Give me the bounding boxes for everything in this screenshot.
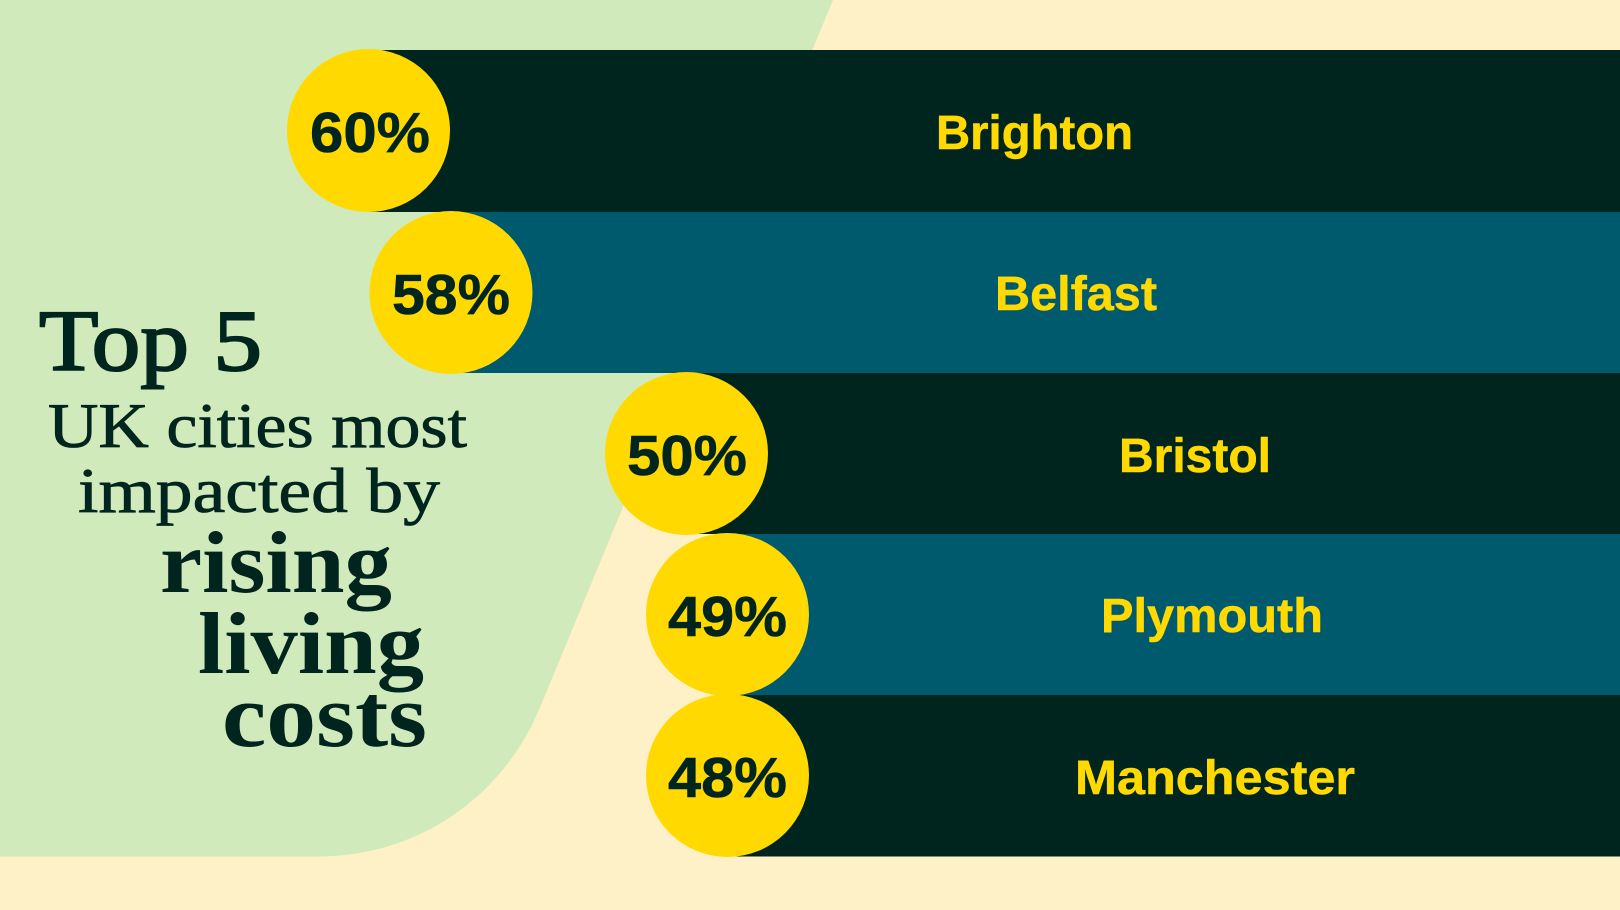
label: Manchester: Manchester [1075,752,1355,805]
row: Brighton 60% [287,49,1620,212]
heading: Top 5: Top 5 [39,292,262,389]
row: Belfast 58% [370,211,1620,374]
value: 50%: 50% [627,424,747,488]
panel: green title shape [0,0,833,856]
emphasis line: costs: costs [222,667,427,766]
title block [39,292,467,766]
circle: 60% [287,49,450,212]
bar: Belfast [451,212,1620,373]
row: Plymouth 49% [646,533,1620,696]
subheading line: UK cities most: UK cities most [48,390,467,461]
bar: Manchester [727,695,1620,856]
circle: 48% [646,694,809,857]
subheading line: impacted by: impacted by [78,455,440,526]
value: 60%: 60% [310,101,430,165]
bar: Bristol [686,373,1620,534]
label: Bristol: Bristol [1119,430,1271,483]
bar: Brighton [368,50,1620,212]
value: 58%: 58% [392,263,510,327]
value: 48%: 48% [668,746,787,810]
value: 49%: 49% [668,585,787,649]
emphasis line: rising: rising [160,515,392,612]
emphasis line: living: living [198,596,424,693]
circle: 50% [605,372,768,535]
row: Manchester 48% [646,694,1620,857]
bar: Plymouth [727,534,1620,695]
label: Belfast: Belfast [995,268,1157,321]
circle: 58% [370,211,532,374]
label: Brighton: Brighton [936,107,1133,160]
row: Bristol 50% [605,372,1620,535]
label: Plymouth: Plymouth [1101,590,1323,643]
circle: 49% [646,533,809,696]
